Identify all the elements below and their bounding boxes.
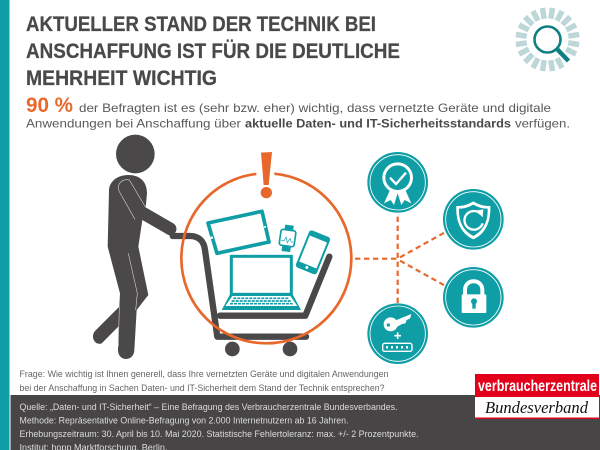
orange circle	[181, 173, 351, 343]
source notes: Quelle: „Daten- und IT-Sicherheit“ – Eine Befragung des Verbraucherzentrale Bundesverbandes.	[20, 402, 398, 413]
footer band	[10, 395, 600, 450]
person	[93, 135, 176, 359]
logo: verbraucherzentrale	[475, 374, 599, 419]
source notes	[20, 402, 418, 450]
survey question: Frage: Wie wichtig ist Ihnen generell, dass Ihre vernetzten Geräte und digitalen Anwendungen	[20, 369, 388, 380]
shopping cart	[173, 236, 329, 356]
title: AKTUELLER STAND DER TECHNIK BEI	[26, 13, 376, 36]
subheading text: 90 %	[26, 94, 73, 117]
icon: key and password	[367, 303, 428, 364]
title	[26, 13, 400, 90]
connector lines and security icons	[355, 152, 504, 364]
title: ANSCHAFFUNG IST FÜR DIE DEUTLICHE	[26, 40, 400, 63]
icon: smartphone	[296, 231, 330, 274]
subheading text: verfügen.	[515, 116, 570, 130]
left accent bar	[0, 0, 10, 450]
title: MEHRHEIT WICHTIG	[26, 67, 217, 90]
subheading text	[26, 94, 570, 130]
illustration: person with cart	[93, 135, 351, 359]
icon: tablet	[208, 211, 269, 253]
icon: shield update	[443, 189, 504, 250]
subheading text: Anwendungen bei Anschaffung über	[26, 116, 241, 130]
icon: padlock	[443, 267, 504, 328]
logo: verbraucherzentrale: Bundesverband	[485, 398, 588, 417]
icon: magnifier with rays	[516, 8, 579, 71]
icon: laptop	[222, 256, 301, 310]
survey question: bei der Anschaffung in Sachen Daten- und IT-Sicherheit dem Stand der Technik entsprechen?	[20, 383, 384, 394]
exclamation mark	[256, 152, 274, 198]
person highlight lines	[118, 180, 146, 347]
icon: smartwatch	[278, 224, 297, 253]
source notes: Erhebungszeitraum: 30. April bis 10. Mai 2020. Statistische Fehlertoleranz: max. +/- 2 Prozentpunkte.	[20, 429, 418, 440]
subheading text: aktuelle Daten- und IT-Sicherheitsstandards	[245, 116, 511, 130]
dashed connectors	[355, 217, 445, 303]
survey question	[20, 369, 388, 394]
source notes: Methode: Repräsentative Online-Befragung von 2.000 Internetnutzern ab 16 Jahren.	[20, 416, 348, 426]
subheading text: der Befragten ist es (sehr bzw. eher) wichtig, dass vernetzte Geräte und digitale	[79, 101, 551, 115]
icon: certificate badge	[367, 152, 428, 213]
